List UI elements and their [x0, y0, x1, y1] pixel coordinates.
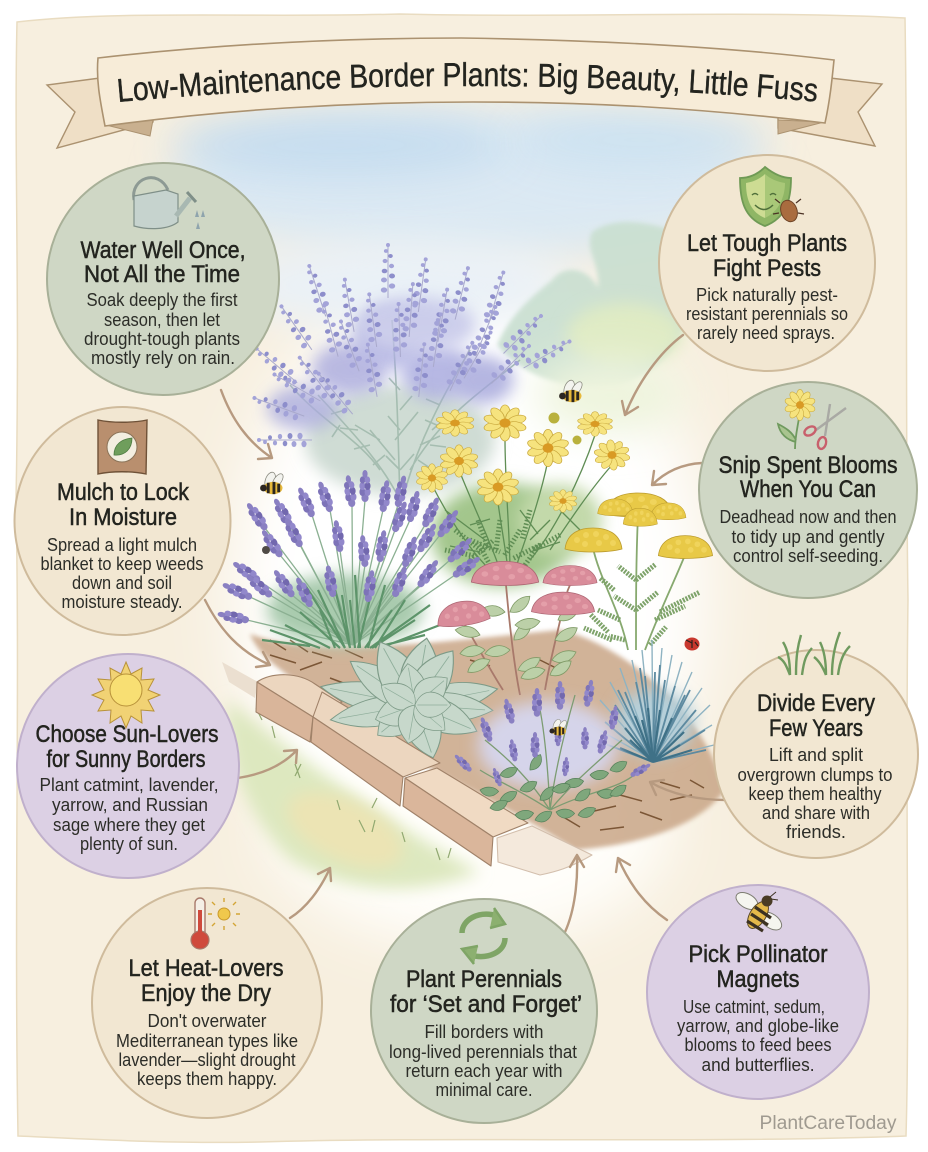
title: Low-Maintenance Border Plants: Big Beauty, Little Fuss: [118, 62, 818, 102]
russian sage: [250, 243, 575, 500]
yellow daisies: [415, 405, 637, 587]
icon: sun: [92, 662, 160, 728]
body text: sage where they get: [53, 815, 205, 835]
heading: Divide Every: [757, 690, 875, 717]
blue fescue grass: [590, 640, 714, 762]
heading: [57, 479, 190, 531]
heading: for ‘Set and Forget’: [390, 991, 582, 1018]
body text: [389, 1022, 577, 1100]
body text: mostly rely on rain.: [91, 348, 235, 368]
heading: [718, 452, 898, 503]
body text: plenty of sun.: [80, 834, 178, 854]
sky wash: [170, 110, 770, 330]
body text: [720, 507, 896, 566]
icon: shield with beetle: [740, 167, 804, 226]
panel: divide: [714, 632, 918, 858]
icon: watering can: [134, 178, 205, 229]
body text: lavender—slight drought: [118, 1050, 296, 1070]
catmint: [452, 679, 652, 823]
body text: rarely need sprays.: [697, 323, 835, 343]
body text: [40, 535, 204, 612]
heading: Not All the Time: [84, 261, 240, 288]
body text: and butterflies.: [702, 1055, 814, 1075]
heading: [390, 966, 582, 1018]
stone edging: [222, 662, 592, 875]
heading: In Moisture: [69, 504, 177, 531]
body text: [738, 745, 892, 842]
icon: mulch bag: [98, 420, 147, 474]
heading: [36, 721, 218, 773]
body text: [677, 997, 839, 1075]
body text: [40, 775, 218, 854]
body text: [116, 1011, 298, 1089]
body text: keep them healthy: [748, 784, 882, 804]
body text: Pick naturally pest-: [696, 285, 838, 305]
lavender clump: [216, 470, 483, 648]
body text: to tidy up and gently: [732, 527, 884, 547]
heading: Magnets: [716, 966, 800, 993]
lamb's ear: [318, 633, 500, 763]
body text: and share with: [762, 803, 870, 823]
body text: blanket to keep weeds: [40, 554, 204, 574]
heading: Fight Pests: [713, 255, 821, 282]
ribbon tail: left: [47, 78, 153, 148]
heading: Water Well Once,: [80, 237, 246, 264]
body text: Don't overwater: [148, 1011, 266, 1031]
body text: overgrown clumps to: [738, 765, 892, 785]
mulch bed: [250, 630, 725, 850]
heading: Let Heat-Lovers: [128, 955, 284, 982]
distant bushes: [497, 222, 690, 433]
body text: [84, 290, 240, 368]
heading: for Sunny Borders: [46, 746, 206, 773]
heading: Plant Perennials: [406, 966, 562, 993]
panel: sun: [17, 654, 239, 878]
icon: thermometer and sun: [191, 898, 240, 949]
heading: [688, 941, 828, 993]
body text: Spread a light mulch: [47, 535, 197, 555]
body text: keeps them happy.: [137, 1069, 277, 1089]
watermark: PlantCareToday: [760, 1113, 897, 1134]
heading: [128, 955, 284, 1007]
body text: Fill borders with: [424, 1022, 544, 1042]
plant illustration: [216, 243, 725, 889]
heading: [80, 237, 246, 288]
body text: Plant catmint, lavender,: [40, 775, 218, 795]
heading: [687, 230, 847, 282]
body text: resistant perennials so: [686, 304, 848, 324]
heading: Choose Sun-Lovers: [36, 721, 218, 748]
body text: control self-seeding.: [733, 546, 883, 566]
panel: pollinator: [647, 885, 869, 1099]
body text: Use catmint, sedum,: [683, 997, 825, 1017]
body text: Deadhead now and then: [720, 507, 896, 527]
title banner: [46, 37, 884, 150]
body text: Soak deeply the first: [86, 290, 238, 310]
panel: heat: [92, 888, 322, 1118]
panel: tough plants: [659, 155, 875, 371]
heading: Let Tough Plants: [687, 230, 847, 257]
sedum: [435, 561, 597, 695]
body text: blooms to feed bees: [684, 1035, 832, 1055]
body text: Mediterranean types like: [116, 1031, 298, 1051]
body text: yarrow, and Russian: [52, 795, 208, 815]
bees and ladybug: [260, 379, 700, 736]
panel: perennials: [371, 899, 597, 1123]
body text: return each year with: [406, 1061, 562, 1081]
body text: long-lived perennials that: [389, 1042, 577, 1062]
icon: recycle arrows: [462, 908, 505, 964]
heading: Enjoy the Dry: [141, 980, 271, 1007]
heading: When You Can: [740, 476, 876, 503]
icon: bee: [733, 889, 785, 934]
icon: flower and scissors: [778, 389, 846, 450]
lawn wash: [227, 700, 480, 889]
heading: Mulch to Lock: [57, 479, 190, 506]
heading: Pick Pollinator: [688, 941, 828, 968]
panel: mulch: [14, 407, 230, 635]
icon: grass clumps: [778, 632, 850, 675]
ribbon body: [97, 38, 834, 126]
body text: Lift and split: [769, 745, 863, 765]
body text: yarrow, and globe-like: [677, 1016, 839, 1036]
yarrow: [565, 493, 713, 650]
body text: [686, 285, 848, 343]
body text: drought-tough plants: [84, 329, 240, 349]
body text: friends.: [786, 822, 846, 842]
heading: [757, 690, 875, 742]
heading: Few Years: [769, 715, 863, 742]
panel: water: [47, 163, 279, 395]
heading: Snip Spent Blooms: [718, 452, 898, 479]
body text: moisture steady.: [62, 592, 182, 612]
body text: minimal care.: [436, 1080, 532, 1100]
body text: down and soil: [72, 573, 172, 593]
ribbon tail: right: [778, 78, 882, 146]
arrows: [205, 335, 726, 932]
panel: snip: [699, 382, 917, 598]
body text: season, then let: [104, 310, 220, 330]
